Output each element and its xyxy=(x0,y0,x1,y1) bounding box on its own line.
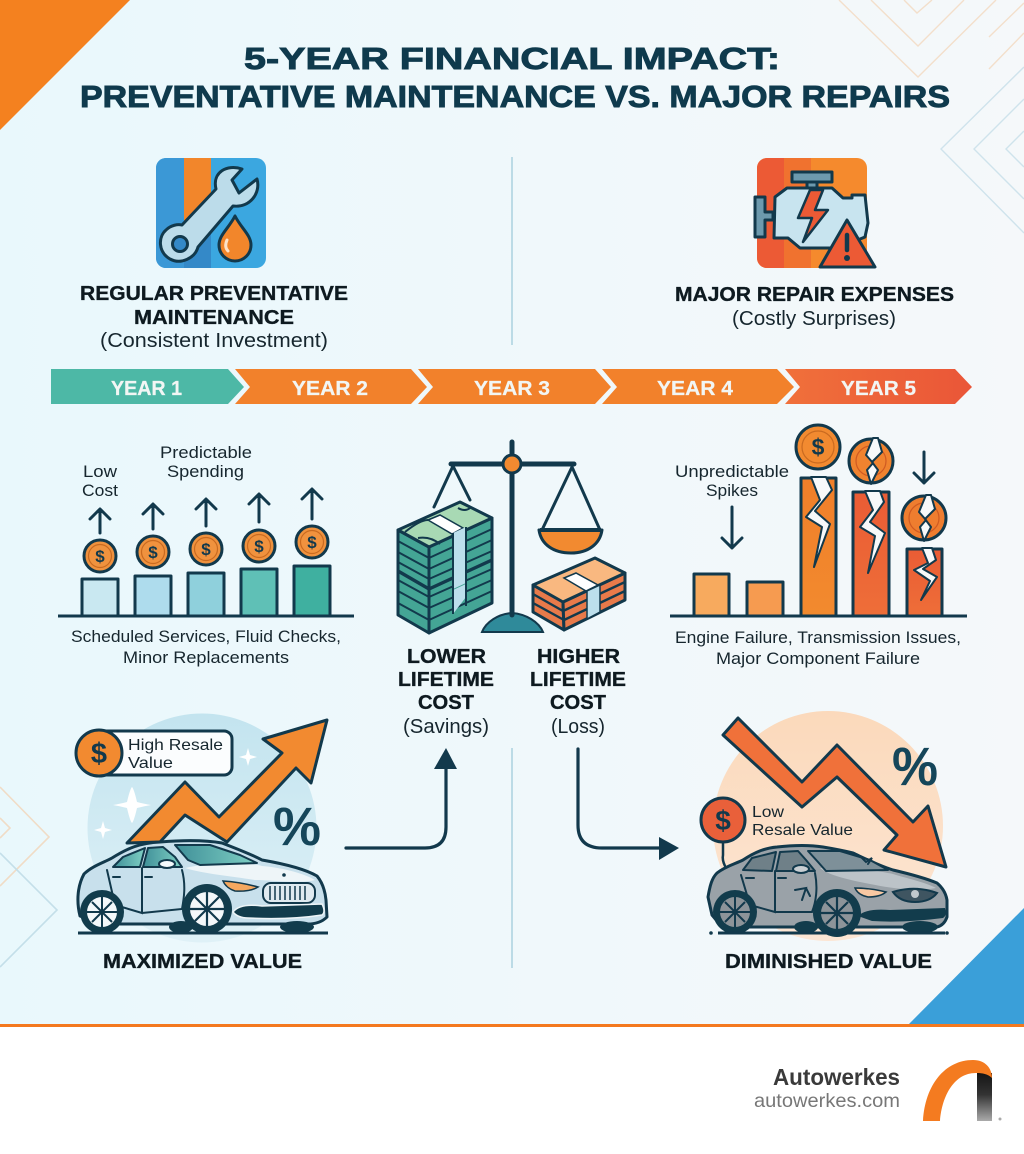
timeline: year chevrons: YEAR 2 xyxy=(292,378,368,400)
timeline: year chevrons: YEAR 3 xyxy=(474,378,550,400)
brand: Autowerkes: Autowerkes xyxy=(773,1064,900,1090)
arrow: loss to diminished value xyxy=(578,749,679,860)
bar chart: unpredictable spikes: Unpredictable xyxy=(675,462,789,481)
bar chart: predictable spending xyxy=(58,443,354,667)
label: higher lifetime cost: (Loss) xyxy=(551,716,605,738)
title: PREVENTATIVE MAINTENANCE VS. MAJOR REPAIRS xyxy=(80,79,950,114)
label: lower lifetime cost: LIFETIME xyxy=(398,668,494,691)
panel: maximized value xyxy=(76,714,328,973)
panel: maximized value: High Resale xyxy=(128,737,223,754)
car: clean sedan xyxy=(78,841,328,934)
heading: preventative maintenance: MAINTENANCE xyxy=(134,306,294,329)
footer band xyxy=(0,1024,1024,1154)
panel: diminished value: Resale Value xyxy=(752,822,853,839)
bar chart: predictable spending: $ xyxy=(254,537,264,556)
panel: maximized value: % xyxy=(273,797,321,857)
heading: major repairs xyxy=(675,283,954,330)
label: higher lifetime cost: COST xyxy=(550,691,606,714)
bar chart: predictable spending: $ xyxy=(95,547,105,566)
money stack: loss xyxy=(533,558,625,630)
panel: diminished value xyxy=(701,711,949,973)
title: 5-YEAR FINANCIAL IMPACT: xyxy=(244,41,780,76)
timeline: year chevrons: YEAR 4 xyxy=(657,378,734,400)
title xyxy=(80,41,950,114)
label: higher lifetime cost xyxy=(530,645,626,738)
bar chart: unpredictable spikes: Engine Failure, Transmission Issues, xyxy=(675,628,961,647)
panel: maximized value: $ xyxy=(91,738,107,770)
corner triangle: blue xyxy=(908,908,1024,1025)
bar chart: predictable spending: $ xyxy=(148,543,158,562)
label: higher lifetime cost: HIGHER xyxy=(537,645,620,668)
heading: preventative maintenance: (Consistent Investment) xyxy=(100,329,328,352)
heading: major repairs: (Costly Surprises) xyxy=(732,308,896,330)
divider: top xyxy=(511,157,513,345)
timeline: year chevrons xyxy=(51,369,972,404)
icon: engine warning xyxy=(755,158,875,268)
bar chart: predictable spending: Predictable xyxy=(160,443,252,462)
corner triangle: orange xyxy=(0,0,130,130)
panel: diminished value: DIMINISHED VALUE xyxy=(725,950,932,973)
bar chart: unpredictable spikes: Major Component Failure xyxy=(716,649,920,668)
bar chart: predictable spending: $ xyxy=(201,540,211,559)
label: lower lifetime cost xyxy=(398,645,494,738)
label: lower lifetime cost: LOWER xyxy=(407,645,486,668)
bar chart: predictable spending: Spending xyxy=(167,462,244,481)
money stack: savings xyxy=(398,502,492,633)
bar chart: predictable spending: Scheduled Services, Fluid Checks, xyxy=(71,627,341,646)
scale: balance comparing costs xyxy=(434,442,602,632)
icon: wrench and oil drop xyxy=(156,158,266,268)
label: higher lifetime cost: LIFETIME xyxy=(530,668,626,691)
bar chart: predictable spending: Low xyxy=(83,462,118,481)
panel: maximized value: Value xyxy=(128,755,173,772)
bar chart: predictable spending: Minor Replacements xyxy=(123,648,289,667)
bar chart: predictable spending: $ xyxy=(307,533,317,552)
panel: maximized value: MAXIMIZED VALUE xyxy=(103,950,302,973)
panel: diminished value: Low xyxy=(752,804,784,821)
bar chart: unpredictable spikes: $ xyxy=(812,434,825,460)
brand: Autowerkes: autowerkes.com xyxy=(754,1090,900,1112)
bar chart: unpredictable spikes xyxy=(670,425,967,668)
panel: diminished value: % xyxy=(892,737,938,797)
car: damaged sedan xyxy=(708,846,949,937)
panel: diminished value: $ xyxy=(715,805,731,836)
heading: preventative maintenance xyxy=(80,282,348,352)
label: lower lifetime cost: (Savings) xyxy=(403,716,489,738)
bar chart: unpredictable spikes: Spikes xyxy=(706,481,758,500)
bar chart: predictable spending: Cost xyxy=(82,481,118,500)
heading: preventative maintenance: REGULAR PREVENTATIVE xyxy=(80,282,348,305)
timeline: year chevrons: YEAR 5 xyxy=(841,378,916,400)
timeline: year chevrons: YEAR 1 xyxy=(111,378,182,400)
brand: Autowerkes xyxy=(754,1060,1002,1121)
label: lower lifetime cost: COST xyxy=(418,691,474,714)
arrow: value to savings xyxy=(346,748,457,848)
heading: major repairs: MAJOR REPAIR EXPENSES xyxy=(675,283,954,306)
divider: bottom xyxy=(511,748,513,968)
